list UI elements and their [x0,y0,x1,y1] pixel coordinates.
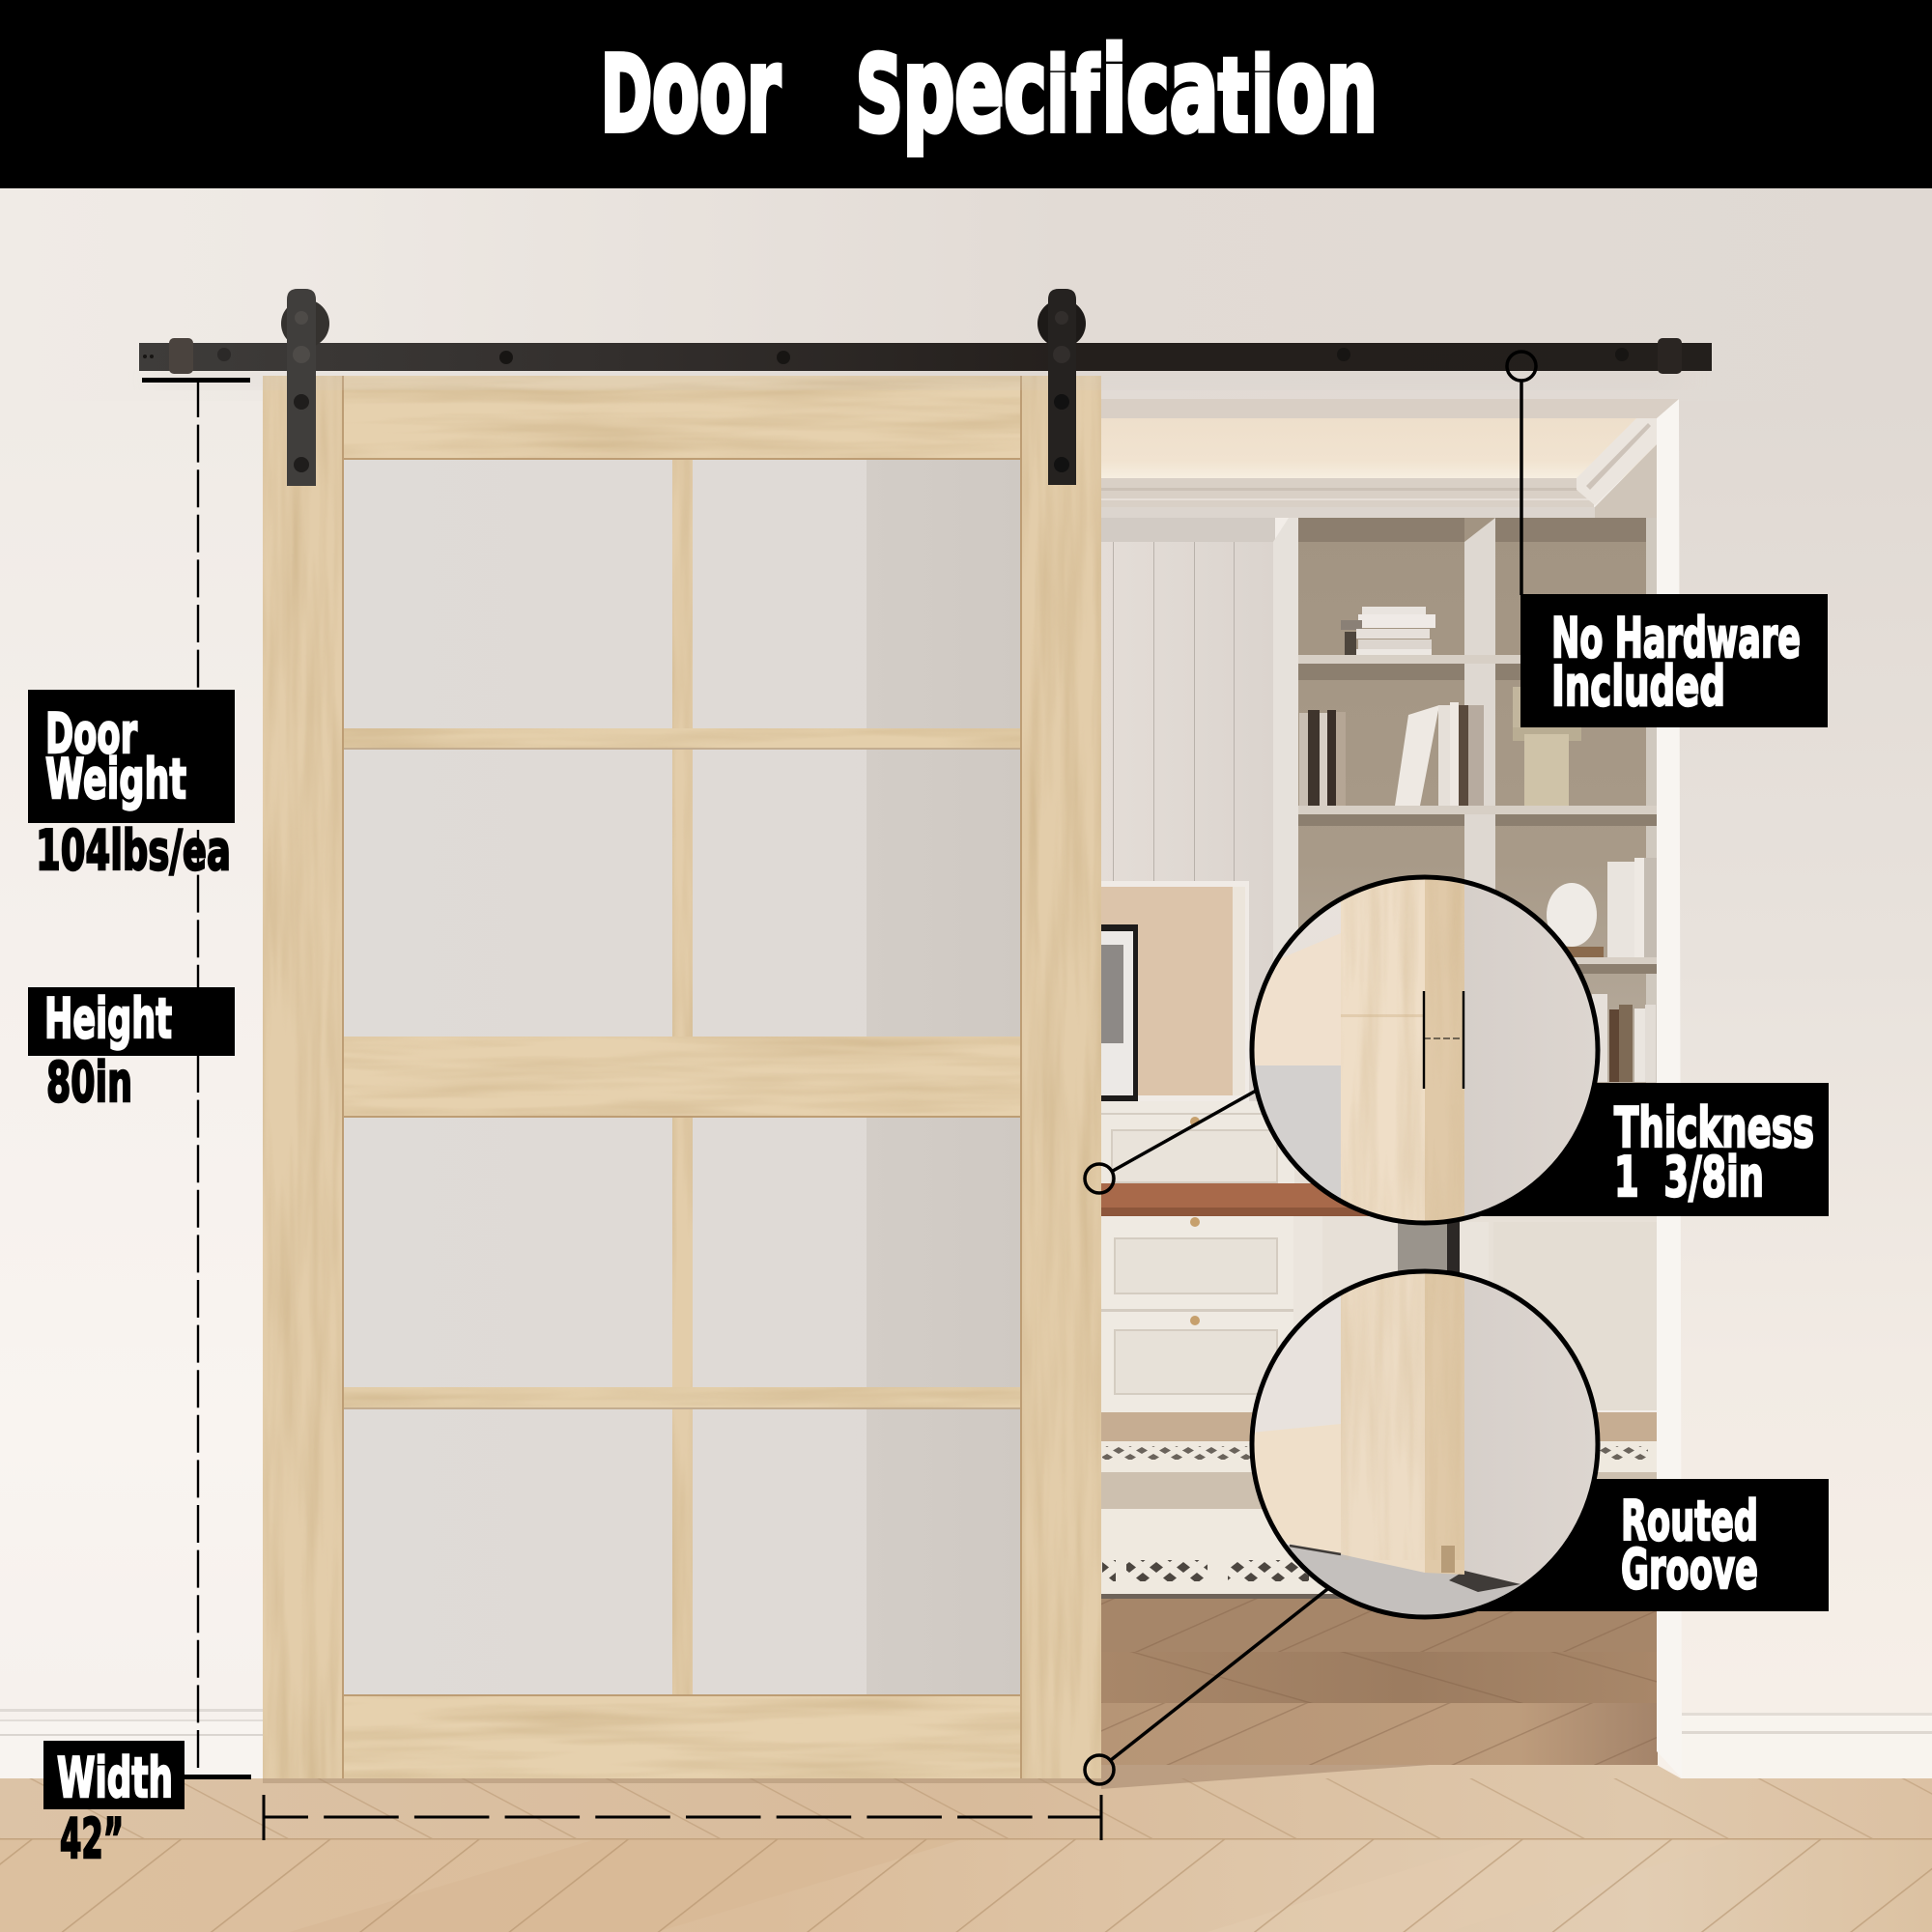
label: height: Height [44,987,172,1051]
walnut desk top [1101,1183,1488,1216]
floor: foreground herringbone [0,1765,1932,1932]
interior wood floor [1101,1599,1658,1765]
top rail [344,376,1020,460]
lower thin rail [344,1387,1020,1409]
right stile [1020,376,1101,1778]
paneled wall [1101,518,1298,1107]
label: no hardware included [1520,594,1828,727]
bottom rail [344,1694,1020,1778]
upper thin rail [344,728,1020,750]
glass panes [344,460,1020,1694]
door floor shadow [263,1778,1101,1783]
barn door [263,376,1101,1778]
value: width: 42” [60,1807,124,1871]
book stack, top shelf [1341,607,1435,655]
door jamb [1657,399,1682,1778]
lintel and ceiling [1101,399,1679,518]
callout: groove pointer [1085,1586,1331,1784]
framed art [1101,881,1249,1101]
callout: thickness pointer [1085,1090,1258,1193]
lower drawers [1101,1217,1293,1416]
books, fourth shelf right [1592,994,1656,1082]
wall: upper band [0,188,1932,401]
title: Specification [856,24,1378,158]
wall: right [1657,401,1932,1782]
left hanger [281,289,329,486]
bookcase [1298,518,1658,1092]
back floor [1101,1412,1658,1443]
label: width [43,1741,185,1810]
label: door weight: Weight [45,748,186,811]
rug [1101,1441,1658,1599]
label: thickness [1478,1083,1829,1216]
height dimension line [142,378,251,1779]
books, second shelf left [1299,710,1346,806]
wall: left [0,401,270,1782]
label: thickness: 1 3/8in [1614,1146,1764,1209]
vertical muntin [672,460,693,1694]
label: thickness: Thickness [1614,1096,1814,1160]
track [139,343,1712,371]
upper drawer [1101,1101,1294,1183]
label: routed groove: Routed [1621,1490,1758,1553]
header band [0,0,1932,188]
interior room seen through opening [1101,399,1679,1765]
width dimension line [264,1795,1101,1840]
label: routed groove: Groove [1621,1538,1758,1602]
value: height: 80in [46,1051,132,1115]
lower wall and cabinets right [1293,1087,1658,1415]
left stile [263,376,344,1778]
right hanger [1037,289,1086,485]
label: no hardware included: Included [1551,655,1725,719]
baseboard: right [1682,1713,1932,1778]
thickness ticks [1424,991,1463,1089]
baseboard: left [0,1709,263,1778]
sculptural lamp [1513,687,1581,806]
rail shadow on wall [155,371,1681,388]
label: door weight [28,690,235,823]
label: width: Width [57,1747,173,1810]
vase and books, third shelf right [1547,858,1657,957]
left stopper [169,338,193,374]
label: door weight: Door [45,702,137,766]
books, second shelf right [1395,702,1484,806]
value: door weight: 104lbs/ea [36,819,231,883]
right stopper [1658,338,1682,374]
middle rail [344,1037,1020,1118]
title: Door [601,24,781,158]
barn door rail hardware [139,338,1712,374]
detail circle: routed groove [1251,1270,1599,1623]
callout: track pointer [1507,352,1536,595]
track bolts [143,348,1629,364]
title [601,24,1378,158]
label: routed groove [1478,1479,1829,1611]
detail circle: thickness [1251,876,1599,1225]
